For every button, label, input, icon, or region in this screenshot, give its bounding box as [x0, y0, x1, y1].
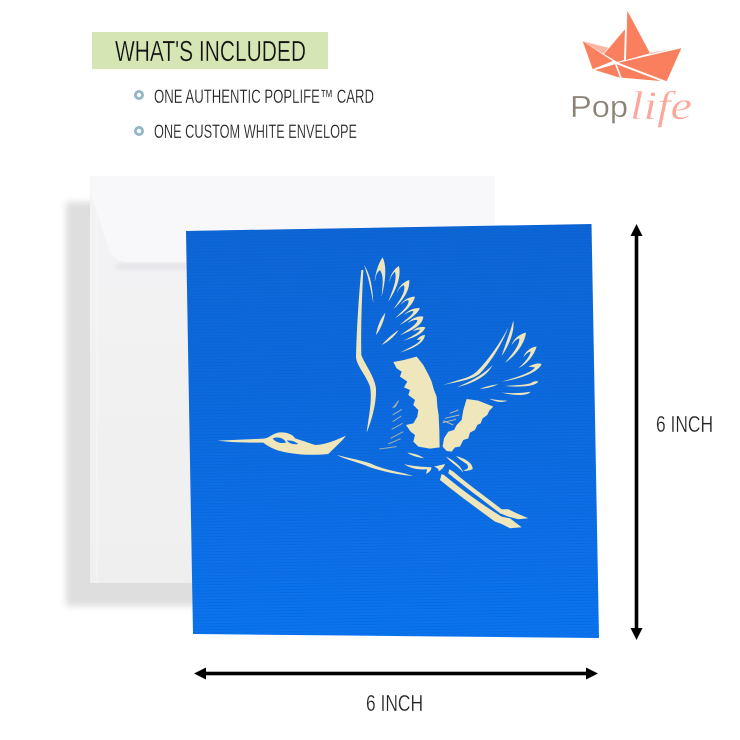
icon: origami boat: [583, 11, 681, 81]
arrow: vertical 6 inch dimension: [630, 224, 642, 640]
card: blue crane pop-up card: [186, 224, 599, 638]
envelope flap: [90, 176, 495, 262]
envelope: [66, 176, 495, 606]
text: Pop: Pop: [570, 89, 628, 124]
label: horizontal 6 inch: 6 INCH: [366, 690, 423, 716]
logo: Poplife: [570, 11, 692, 128]
near wing leading edge: [356, 270, 376, 433]
arrow: horizontal 6 inch dimension: [194, 668, 598, 680]
heading: what's included: WHAT'S INCLUDED: [115, 36, 306, 68]
bullet: card item: [135, 91, 143, 99]
text: envelope item: ONE CUSTOM WHITE ENVELOPE: [154, 122, 357, 143]
envelope shadow: [66, 202, 201, 606]
small body feathers: [379, 401, 403, 449]
text: life: life: [630, 83, 692, 128]
body lines: [407, 453, 424, 458]
label: vertical 6 inch: 6 INCH: [656, 411, 713, 437]
bullet: envelope item: [135, 127, 143, 135]
crane legs: [448, 469, 528, 519]
far wing white band: [443, 399, 493, 452]
near wing white band: [393, 357, 440, 449]
heading: what's included: [92, 32, 328, 69]
icon: crane cut-out: [217, 257, 542, 528]
envelope flap shadow: [116, 264, 188, 269]
far wing leading edge and feathers: [443, 327, 508, 385]
list: included items: [135, 87, 374, 143]
crane neck: [337, 455, 413, 476]
card face: [186, 224, 599, 638]
near wing feathers: [364, 265, 373, 303]
envelope body: [90, 176, 495, 583]
text: card item: ONE AUTHENTIC POPLIFE™ CARD: [154, 87, 374, 108]
crane head and beak: [217, 432, 346, 455]
